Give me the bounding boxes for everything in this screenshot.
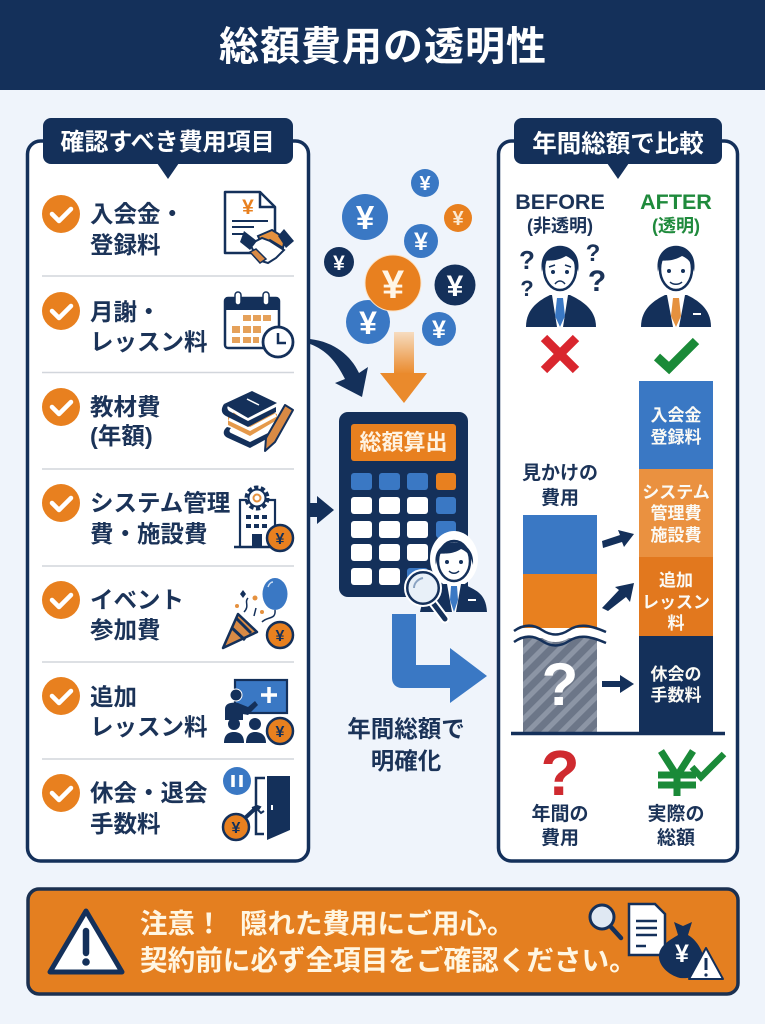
panel heading: cost items bbox=[43, 118, 293, 179]
segment: system and facility: システム bbox=[642, 483, 710, 502]
item: system and facility fee bbox=[42, 484, 293, 551]
chart: before bar: ? bbox=[542, 651, 578, 718]
item: enrollment fee: 入会金・ bbox=[90, 201, 184, 227]
icon: confused person: ? bbox=[519, 245, 535, 275]
panel heading: annual comparison bbox=[514, 118, 722, 179]
falling yen coins: ¥ bbox=[333, 252, 345, 275]
panel: annual total comparison bbox=[498, 118, 738, 861]
arrow: calculator to annual comparison bbox=[392, 614, 487, 703]
segment: suspension fee bbox=[639, 636, 713, 733]
text: clarified by annual total: 明確化 bbox=[371, 748, 441, 774]
segment: system and facility: 施設費 bbox=[650, 526, 702, 545]
label: actual total bbox=[647, 803, 705, 849]
item: suspension and withdrawal fee bbox=[42, 767, 290, 840]
calculator bbox=[339, 412, 468, 597]
item: textbook fee: 教材費 bbox=[90, 394, 160, 420]
panel heading: annual comparison: 年間総額で比較 bbox=[532, 130, 704, 158]
label: annual cost: 費用 bbox=[541, 827, 579, 849]
icon: confused person bbox=[519, 240, 606, 327]
item: event fee: 参加費 bbox=[90, 617, 160, 643]
falling yen coins: ¥ bbox=[382, 263, 405, 307]
falling yen coins: ¥ bbox=[356, 199, 375, 236]
text: clarified by annual total: 年間総額で bbox=[347, 716, 465, 742]
chart: before bar bbox=[514, 515, 606, 733]
falling yen coins: ¥ bbox=[359, 305, 377, 341]
item: textbook fee bbox=[42, 388, 293, 451]
item: system and facility fee: 費・施設費 bbox=[90, 521, 208, 547]
after column heading: AFTER bbox=[640, 190, 712, 214]
label: apparent cost bbox=[522, 463, 598, 509]
item: textbook fee: (年額) bbox=[90, 423, 153, 449]
label: actual total: 実際の bbox=[647, 803, 705, 825]
icon: warning triangle bbox=[50, 911, 122, 972]
arrow: before to after top bbox=[602, 530, 634, 548]
before column heading bbox=[515, 190, 605, 236]
segment: enrollment: 登録料 bbox=[650, 428, 702, 447]
item: enrollment fee: 登録料 bbox=[90, 232, 160, 258]
falling yen coins bbox=[324, 169, 476, 346]
label: annual cost bbox=[531, 802, 589, 849]
icon: red question mark: ? bbox=[540, 737, 580, 809]
icon: pause, door and coin bbox=[223, 767, 290, 840]
warning text: 注意！ bbox=[140, 908, 222, 939]
label: apparent cost: 費用 bbox=[541, 487, 579, 509]
segment: suspension fee: 手数料 bbox=[650, 685, 702, 705]
item: monthly lesson fee: レッスン料 bbox=[90, 329, 208, 355]
segment: additional lessons: レッスン bbox=[642, 593, 710, 612]
label: apparent cost: 見かけの bbox=[522, 463, 598, 484]
segment: suspension fee: 休会の bbox=[650, 665, 702, 684]
icon: contract and handshake: ¥ bbox=[242, 196, 254, 219]
item: monthly lesson fee: 月謝・ bbox=[90, 299, 160, 325]
falling yen coins: ¥ bbox=[419, 173, 431, 195]
icons: magnifier, document, money bag: ¥ bbox=[675, 940, 689, 968]
item: additional lesson fee: 追加 bbox=[90, 684, 137, 710]
icon: gear, building and coin bbox=[234, 488, 293, 551]
title banner bbox=[0, 0, 765, 90]
icon: contract and handshake bbox=[225, 192, 294, 263]
arrow: before to after bottom bbox=[602, 675, 634, 693]
warning text: 契約前に必ず全項目をご確認ください。 bbox=[140, 945, 637, 976]
label: actual total: 総額 bbox=[657, 827, 695, 849]
icon: calendar and clock bbox=[225, 292, 293, 357]
icon: confident person bbox=[641, 246, 711, 327]
icon: gear, building and coin: ¥ bbox=[276, 531, 285, 548]
after column heading: (透明) bbox=[652, 216, 700, 236]
item: monthly lesson fee bbox=[42, 292, 293, 357]
segment: additional lessons bbox=[639, 557, 713, 636]
icons: magnifier, document, money bag bbox=[590, 904, 723, 979]
segment: additional lessons: 料 bbox=[668, 614, 684, 633]
segment: additional lessons: 追加 bbox=[659, 571, 693, 590]
segment: system and facility bbox=[639, 469, 713, 557]
arrow: curved from list to calculator bbox=[310, 339, 368, 397]
arrow: coins into calculator bbox=[380, 332, 427, 403]
arrow: before to after middle bbox=[602, 583, 634, 611]
after column heading bbox=[640, 190, 712, 236]
icon: party popper, balloon and coin: ¥ bbox=[276, 628, 285, 645]
title banner: 総額費用の透明性 bbox=[219, 25, 547, 69]
icon: party popper, balloon and coin bbox=[223, 578, 293, 648]
panel heading: cost items: 確認すべき費用項目 bbox=[60, 129, 275, 156]
falling yen coins: ¥ bbox=[432, 316, 446, 344]
calculator display bbox=[351, 424, 456, 461]
item: enrollment fee bbox=[42, 192, 294, 263]
segment: enrollment bbox=[639, 381, 713, 469]
icon: pause, door and coin: ¥ bbox=[232, 820, 241, 837]
person with magnifying glass bbox=[405, 531, 487, 619]
falling yen coins: ¥ bbox=[414, 228, 428, 256]
warning text bbox=[140, 908, 637, 976]
icon: red cross bbox=[544, 338, 576, 370]
label: annual cost: 年間の bbox=[531, 802, 589, 825]
before column heading: BEFORE bbox=[515, 190, 605, 214]
icon: teacher, board and coin bbox=[224, 680, 293, 744]
warning text: 隠れた費用にご用心。 bbox=[240, 908, 514, 939]
item: suspension and withdrawal fee: 手数料 bbox=[90, 811, 160, 837]
before column heading: (非透明) bbox=[527, 216, 593, 236]
item: additional lesson fee bbox=[42, 677, 293, 744]
falling yen coins: ¥ bbox=[447, 270, 464, 303]
icon: confused person: ? bbox=[586, 240, 600, 267]
icon: green yen with check bbox=[658, 751, 724, 796]
icon: green check bbox=[657, 341, 696, 368]
calculator display: 総額算出 bbox=[359, 430, 448, 455]
segment: system and facility: 管理費 bbox=[650, 503, 702, 523]
item: additional lesson fee: レッスン料 bbox=[90, 714, 208, 740]
item: event fee: イベント bbox=[90, 587, 184, 613]
chart: after bar bbox=[639, 381, 713, 733]
item: event fee bbox=[42, 578, 293, 648]
item: suspension and withdrawal fee: 休会・退会 bbox=[90, 780, 208, 806]
icon: confused person: ? bbox=[588, 265, 606, 298]
text: clarified by annual total bbox=[347, 716, 465, 774]
segment: enrollment: 入会金 bbox=[650, 405, 702, 425]
panel: cost items checklist bbox=[28, 118, 308, 861]
arrow: list to calculator bbox=[310, 496, 334, 524]
icon: books and pencil bbox=[222, 391, 293, 451]
callout: hidden cost warning bbox=[28, 889, 738, 994]
icon: confused person: ? bbox=[520, 276, 534, 301]
falling yen coins: ¥ bbox=[452, 208, 464, 230]
item: system and facility fee: システム管理 bbox=[90, 490, 230, 516]
icon: teacher, board and coin: ¥ bbox=[276, 724, 285, 741]
